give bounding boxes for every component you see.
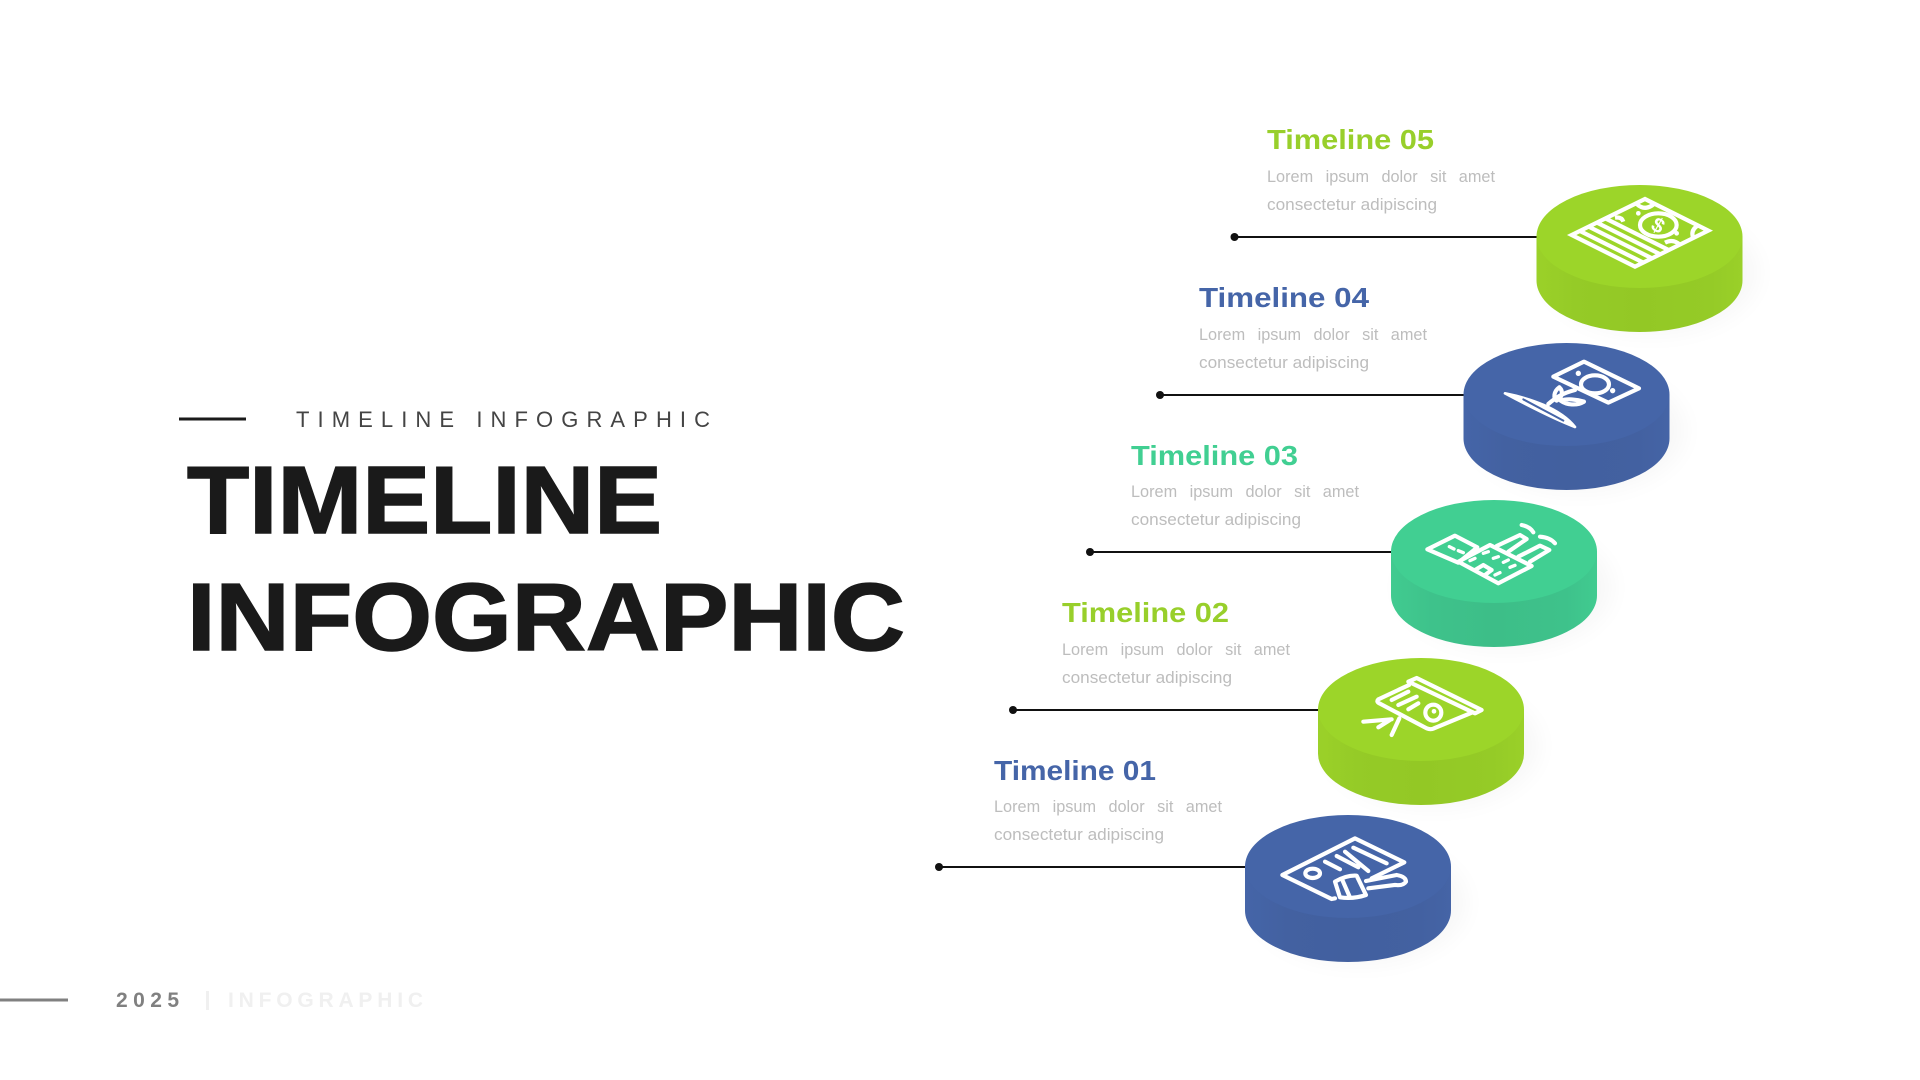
- timeline 03: [1086, 440, 1612, 650]
- connector 01: [935, 863, 1248, 871]
- heading 01: Timeline 01: [994, 755, 1156, 786]
- disc 03: [1391, 500, 1612, 650]
- timeline 04: [1156, 282, 1684, 492]
- icon: plant and banknote: [1505, 362, 1639, 427]
- heading 04: Timeline 04: [1199, 282, 1369, 313]
- connector 02: [1009, 706, 1322, 714]
- icon: document and brush: [1282, 838, 1406, 899]
- footer: 2025: [116, 989, 179, 1012]
- timeline 01: [935, 755, 1466, 964]
- text 03: Lorem ipsum dolor sit amet: [1131, 483, 1359, 501]
- heading 03: Timeline 03: [1131, 440, 1298, 471]
- text 02: [1062, 641, 1290, 687]
- connector 04: [1156, 391, 1467, 399]
- title: INFOGRAPHIC: [187, 564, 905, 671]
- text 03: [1131, 483, 1359, 529]
- text 05: [1267, 168, 1495, 214]
- subtitle rule: [179, 418, 246, 420]
- connector 03: [1086, 548, 1395, 556]
- footer: INFOGRAPHIC: [228, 989, 423, 1012]
- text 01: Lorem ipsum dolor sit amet: [994, 798, 1222, 816]
- disc 05: [1536, 185, 1758, 334]
- title: [187, 447, 905, 671]
- text 02: consectetur adipiscing: [1062, 669, 1232, 687]
- heading 02: Timeline 02: [1062, 597, 1229, 628]
- text 02: Lorem ipsum dolor sit amet: [1062, 641, 1290, 659]
- text 04: consectetur adipiscing: [1199, 354, 1369, 372]
- title: TIMELINE: [187, 447, 662, 554]
- icon: presentation board: [1363, 678, 1482, 735]
- timeline 05: [1230, 124, 1758, 334]
- icon: factory buildings: [1427, 525, 1555, 583]
- disc 01: [1245, 815, 1466, 964]
- text 03: consectetur adipiscing: [1131, 511, 1301, 529]
- icon: banknote: $: [1647, 213, 1669, 239]
- disc 02: [1318, 658, 1539, 808]
- text 05: Lorem ipsum dolor sit amet: [1267, 168, 1495, 186]
- text 04: [1199, 326, 1427, 372]
- text 01: consectetur adipiscing: [994, 826, 1164, 844]
- subtitle: TIMELINE INFOGRAPHIC: [296, 407, 710, 432]
- connector 05: [1230, 233, 1540, 241]
- disc 04: [1464, 343, 1684, 492]
- text 05: consectetur adipiscing: [1267, 196, 1437, 214]
- timeline 02: [1009, 597, 1539, 808]
- text 01: [994, 798, 1222, 844]
- footer: [0, 989, 423, 1012]
- text 04: Lorem ipsum dolor sit amet: [1199, 326, 1427, 344]
- icon: banknote: [1572, 199, 1708, 267]
- heading 05: Timeline 05: [1267, 124, 1434, 155]
